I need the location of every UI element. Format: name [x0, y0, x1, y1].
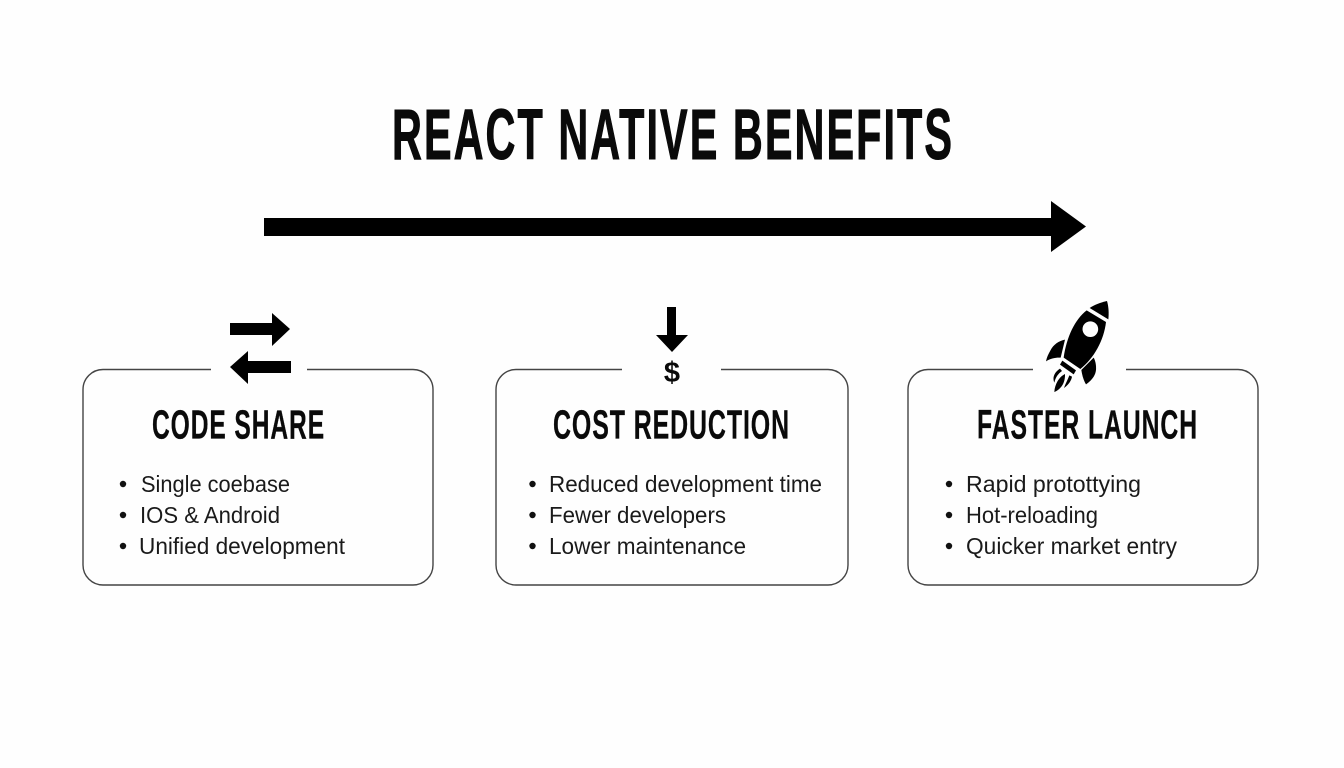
icon: rocket — [1046, 301, 1109, 392]
bullet list: cost reduction — [529, 471, 822, 559]
panel: cost reduction — [496, 307, 848, 585]
heading: cost reduction: COST REDUCTION — [553, 402, 790, 448]
panel frame — [83, 370, 433, 585]
bullet list: cost reduction: Reduced development time — [549, 471, 822, 497]
bullet list: faster launch: Rapid protottying — [966, 471, 1141, 497]
icon: down arrow and dollar: $ — [664, 357, 680, 389]
bullet list: faster launch — [946, 471, 1177, 559]
panel frame — [496, 370, 848, 585]
icon: swap arrows — [230, 313, 291, 384]
bullet list: code share: IOS & Android — [140, 502, 280, 528]
bullet list: code share: Single coebase — [141, 471, 290, 497]
panel frame — [908, 370, 1258, 585]
title: REACT NATIVE BENEFITS — [392, 96, 954, 175]
bullet list: faster launch: Hot-reloading — [966, 502, 1098, 528]
arrow: timeline progress — [264, 201, 1086, 252]
panel: code share — [83, 313, 433, 585]
bullet list: cost reduction: Lower maintenance — [549, 533, 746, 559]
bullet list: code share — [120, 471, 346, 559]
bullet list: faster launch: Quicker market entry — [966, 533, 1177, 559]
bullet list: cost reduction: Fewer developers — [549, 502, 726, 528]
heading: code share: CODE SHARE — [152, 402, 325, 448]
panel: faster launch — [908, 301, 1258, 585]
heading: faster launch: FASTER LAUNCH — [977, 402, 1198, 448]
icon: down arrow and dollar — [656, 307, 688, 389]
bullet list: code share: Unified development — [139, 533, 346, 559]
